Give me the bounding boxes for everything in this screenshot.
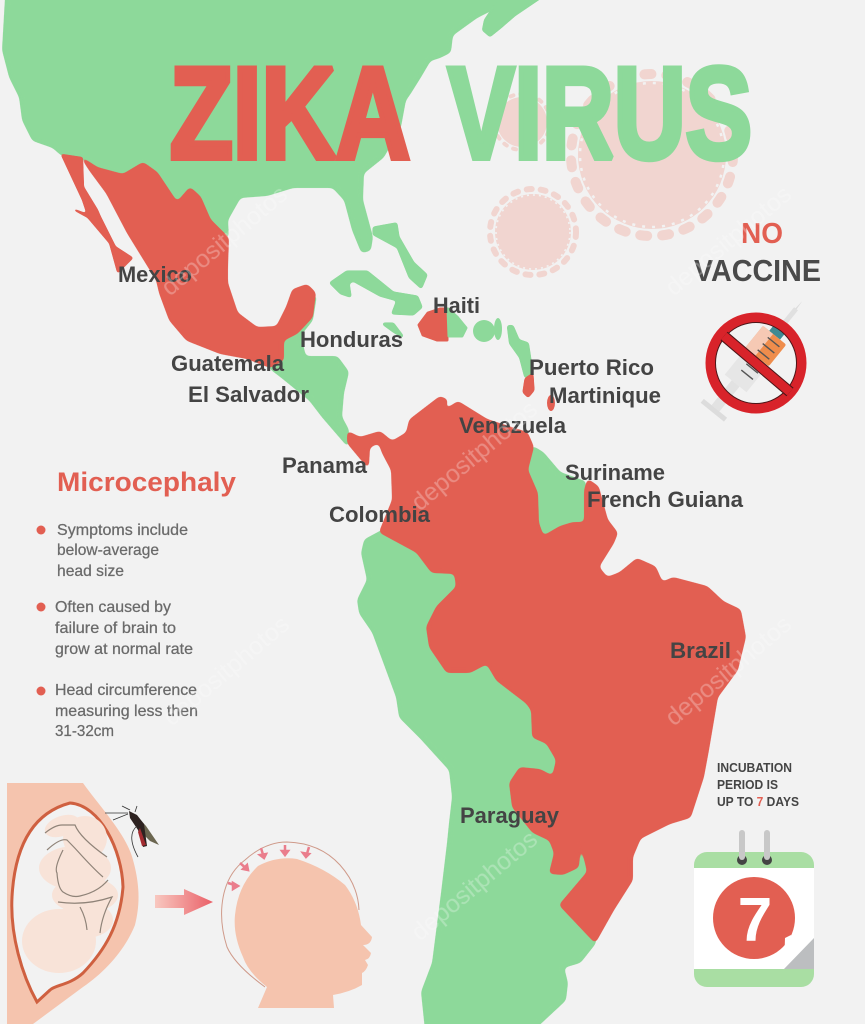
country labels: Mexico xyxy=(118,262,192,287)
incubation text: PERIOD IS xyxy=(717,777,778,792)
country labels: Venezuela xyxy=(459,413,567,438)
virus particles xyxy=(490,74,733,275)
watermark: depositphotos xyxy=(156,180,293,302)
incubation text: UP TO 7 DAYS xyxy=(717,794,799,809)
Haiti xyxy=(419,309,447,340)
compression arrows xyxy=(228,845,309,889)
page curl xyxy=(784,935,798,969)
country labels: Panama xyxy=(282,453,368,478)
prohibition ring xyxy=(710,318,802,408)
incubation text xyxy=(717,760,799,809)
country labels: Guatemala xyxy=(171,351,285,376)
icon: calendar xyxy=(694,830,814,987)
bullet: cause: grow at normal rate xyxy=(55,641,193,658)
no vaccine heading: VACCINE xyxy=(694,253,821,288)
incubation text: INCUBATION xyxy=(717,760,792,775)
icon: infant head with normal outline xyxy=(222,842,372,1008)
Puerto Rico islands xyxy=(473,318,502,342)
Jamaica xyxy=(384,324,402,336)
watermark: depositphotos xyxy=(158,610,295,732)
bullet: circumference: measuring less then xyxy=(55,703,198,720)
Dominican Republic xyxy=(448,309,466,336)
panel: microcephaly xyxy=(36,467,236,740)
Lesser Antilles xyxy=(509,327,531,376)
country labels: Colombia xyxy=(329,502,431,527)
country labels: French Guiana xyxy=(587,487,744,512)
bullet: circumference: 31-32cm xyxy=(55,723,114,740)
watermark: depositphotos xyxy=(660,180,797,302)
normal head outline xyxy=(222,842,359,987)
watermark xyxy=(156,180,797,947)
Colombia, Venezuela, Brazil xyxy=(348,397,745,942)
Bahamas xyxy=(374,224,426,287)
country labels: Brazil xyxy=(670,638,731,663)
bullet: symptoms: head size xyxy=(57,563,124,580)
title word: ZIKA: ZIKA xyxy=(170,40,410,186)
Martinique red island xyxy=(547,395,555,411)
virus: large xyxy=(571,74,733,236)
bullet: cause: Often caused by xyxy=(55,599,171,616)
country labels: Puerto Rico xyxy=(529,355,654,380)
reduced head xyxy=(235,858,372,1008)
South America green xyxy=(358,447,600,1024)
icon: pregnant womb with fetus xyxy=(7,783,139,1024)
watermark: depositphotos xyxy=(660,610,797,732)
Atlantic Canada lobe xyxy=(483,0,552,36)
Mexico xyxy=(62,155,315,367)
bullet: symptoms xyxy=(36,522,188,580)
bullet: circumference: Head circumference xyxy=(55,682,197,699)
bullet: symptoms: below-average xyxy=(57,542,159,559)
Baja California xyxy=(62,155,132,272)
country labels: Suriname xyxy=(565,460,665,485)
country labels: Haiti xyxy=(433,293,480,318)
day circle xyxy=(713,877,795,959)
abdomen xyxy=(7,783,139,1024)
country labels: Honduras xyxy=(300,327,403,352)
country labels: Martinique xyxy=(549,383,661,408)
calendar page xyxy=(694,852,814,987)
Mexico mainland xyxy=(82,158,315,367)
bullet: cause: failure of brain to xyxy=(55,620,176,637)
country labels: Paraguay xyxy=(460,803,560,828)
bullet: circumference xyxy=(36,682,198,740)
Central America xyxy=(270,295,348,446)
day number: 7 xyxy=(738,886,772,955)
title word: VIRUS: VIRUS xyxy=(448,40,752,186)
Cuba xyxy=(331,272,421,314)
country labels xyxy=(118,262,744,828)
country labels: El Salvador xyxy=(188,382,309,407)
bullet: cause xyxy=(36,599,193,658)
icon: no vaccine syringe xyxy=(701,292,814,422)
arrow: progression to microcephaly xyxy=(155,889,213,915)
no vaccine heading xyxy=(694,218,821,288)
binder rings xyxy=(737,830,772,865)
fetus xyxy=(22,810,118,973)
womb xyxy=(12,803,123,1002)
no vaccine heading: NO xyxy=(741,218,783,250)
bullet: symptoms: Symptoms include xyxy=(57,522,188,539)
watermark: depositphotos xyxy=(406,395,543,517)
watermark: depositphotos xyxy=(406,825,543,947)
virus: small xyxy=(494,94,550,150)
page fold xyxy=(784,938,814,969)
title xyxy=(170,40,752,186)
heading: Microcephaly xyxy=(57,467,236,497)
Puerto Rico red island xyxy=(524,375,533,396)
icon: mosquito xyxy=(105,806,159,857)
North America xyxy=(3,0,500,252)
virus: medium xyxy=(490,189,576,275)
syringe xyxy=(701,292,814,422)
